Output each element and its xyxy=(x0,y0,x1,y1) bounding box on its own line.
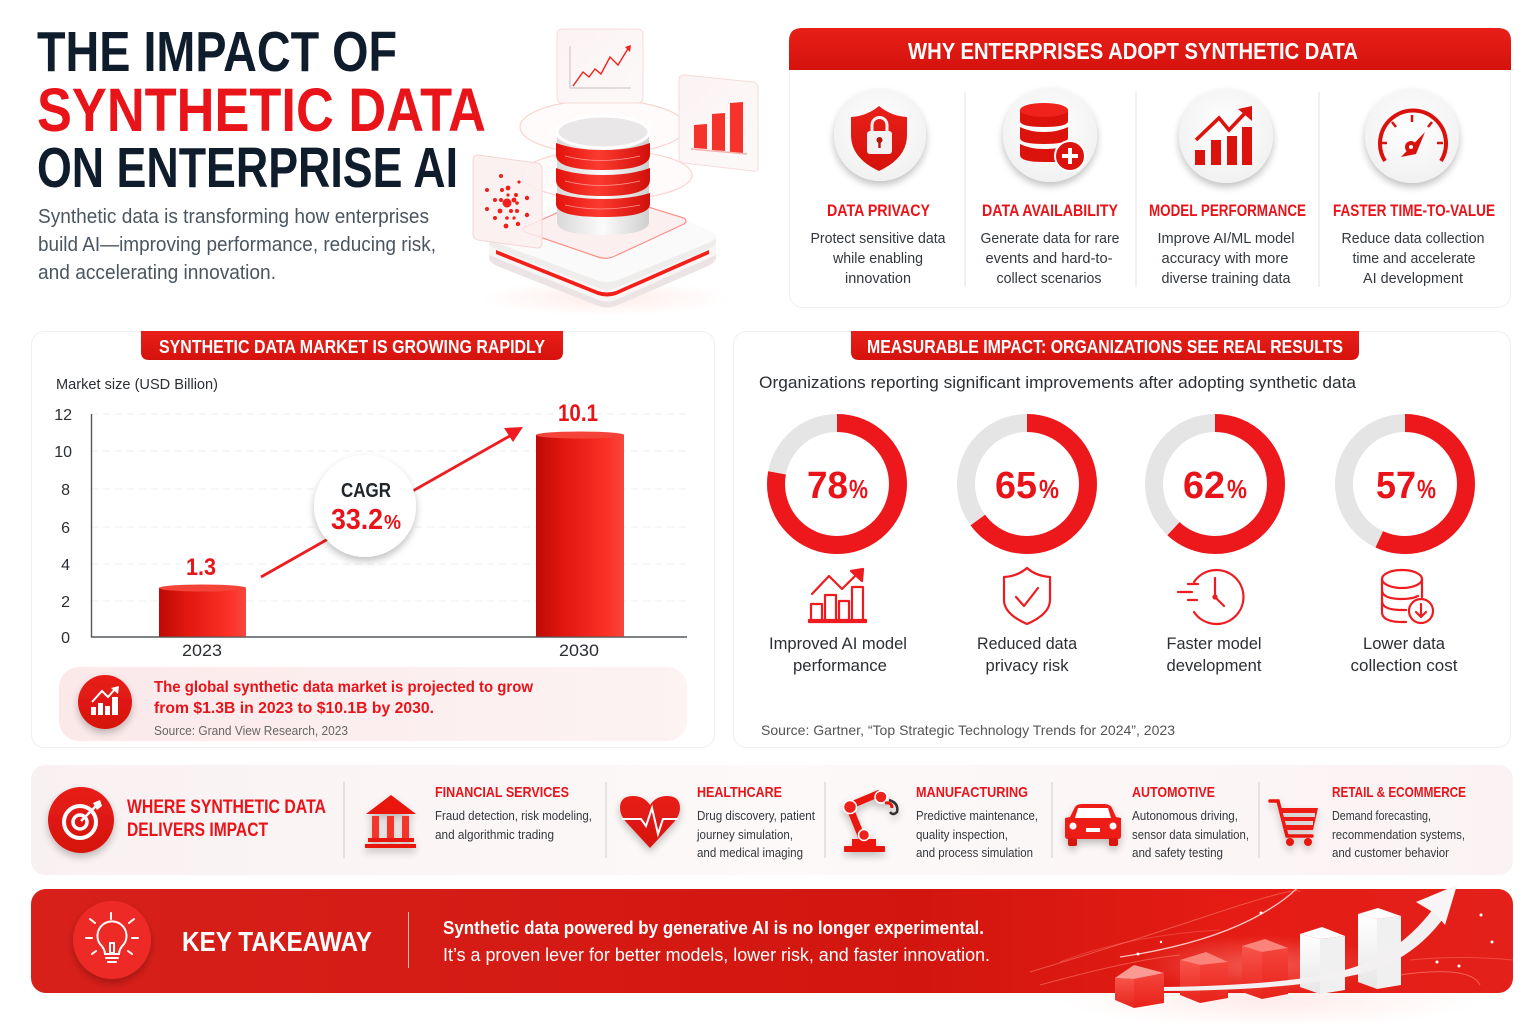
panel: bar chart xyxy=(679,75,758,171)
sector: manufacturing: quality inspection, xyxy=(916,828,1008,842)
callout: market projection: The global synthetic data market is projected to grow xyxy=(154,679,534,696)
card: data privacy xyxy=(810,89,946,287)
donut chart: 78 xyxy=(807,465,848,507)
donut chart xyxy=(776,423,898,545)
sector: manufacturing: and process simulation xyxy=(916,846,1033,860)
sector: retail and ecommerce: and customer behavior xyxy=(1332,846,1449,860)
panel header: WHY ENTERPRISES ADOPT SYNTHETIC DATA xyxy=(908,38,1358,64)
card: data privacy: Protect sensitive data xyxy=(810,231,946,247)
bar 2030: 10.1 xyxy=(558,400,598,427)
cylinder xyxy=(557,132,649,235)
card: model performance xyxy=(1149,89,1306,287)
card: model performance: Improve AI/ML model xyxy=(1158,231,1294,247)
card: faster time-to-value: time and accelerate xyxy=(1352,251,1476,267)
section heading: DELIVERS IMPACT xyxy=(127,819,268,841)
title: THE IMPACT OF xyxy=(37,20,397,84)
sector: automotive: Autonomous driving, xyxy=(1132,809,1238,823)
panel header tab xyxy=(851,331,1359,360)
sector: healthcare: HEALTHCARE xyxy=(697,784,782,801)
illustration: rising cubes and arrow xyxy=(1115,885,1457,1008)
metric: 65%: Reduced data xyxy=(977,635,1078,653)
arrow: growth xyxy=(261,427,523,577)
panel: dot cluster xyxy=(473,155,542,248)
takeaway message: Synthetic data powered by generative AI is no longer experimental. xyxy=(443,918,984,938)
card: data privacy: innovation xyxy=(845,271,911,287)
icon: shopping cart xyxy=(1270,801,1318,846)
metric: 62% xyxy=(1154,423,1276,675)
section heading xyxy=(48,787,326,853)
sector: healthcare: journey simulation, xyxy=(696,828,793,842)
bar chart: 8 xyxy=(61,482,70,499)
light swooshes xyxy=(1030,885,1513,985)
callout: CAGR: CAGR xyxy=(341,480,391,502)
card: model performance: accuracy with more xyxy=(1162,251,1288,267)
illustration: database on platform xyxy=(473,29,758,316)
icon: database down xyxy=(1382,570,1433,623)
card: data privacy: DATA PRIVACY xyxy=(827,201,931,220)
sector: retail and ecommerce: Demand forecasting, xyxy=(1332,809,1431,823)
subtitle: build AI—improving performance, reducing risk, xyxy=(38,234,436,256)
bar chart: 6 xyxy=(61,520,70,537)
panel: measurable impact xyxy=(734,331,1510,748)
metric: 57%: Lower data xyxy=(1363,635,1446,653)
icon: growth chart xyxy=(78,675,132,729)
panel: why enterprises adopt xyxy=(789,28,1511,308)
bar 2023: 2023 xyxy=(182,642,222,660)
arrow: growth xyxy=(1164,885,1457,991)
card: faster time-to-value xyxy=(1333,89,1495,287)
sector: automotive xyxy=(1065,784,1249,860)
card: data availability: DATA AVAILABILITY xyxy=(982,201,1119,220)
icon: heart pulse xyxy=(620,796,680,848)
panel: market growth chart xyxy=(32,331,714,748)
metric: 65% xyxy=(966,423,1088,675)
panel header tab xyxy=(141,331,563,360)
cube 4 xyxy=(1300,927,1345,994)
card: data availability xyxy=(980,88,1120,287)
subtitle xyxy=(38,206,436,284)
donut chart: % xyxy=(849,474,868,504)
icon: speedometer xyxy=(1365,89,1459,183)
panel: key takeaway: KEY TAKEAWAY xyxy=(182,926,372,957)
icon: rising bars xyxy=(1179,89,1273,183)
panel header tab: SYNTHETIC DATA MARKET IS GROWING RAPIDLY xyxy=(159,337,545,357)
sector: financial services: and algorithmic trading xyxy=(435,828,554,842)
icon: shield lock xyxy=(834,89,926,181)
metric: 57% xyxy=(1344,423,1466,675)
bar chart xyxy=(54,400,687,660)
metric: 62%: development xyxy=(1166,657,1262,675)
icon: clock speed xyxy=(1178,570,1243,624)
panel: measurable impact: Source: Gartner, “Top Strategic Technology Trends for 2024”, 2023 xyxy=(761,722,1175,738)
upper slab xyxy=(489,190,716,290)
card: faster time-to-value: FASTER TIME-TO-VALUE xyxy=(1333,201,1495,220)
sector: financial services: Fraud detection, risk modeling, xyxy=(435,809,592,823)
panel: market growth chart: Market size (USD Billion) xyxy=(56,376,218,393)
donut chart: 57 xyxy=(1376,465,1416,507)
sector: retail and ecommerce: recommendation systems, xyxy=(1332,828,1465,842)
orbit rings xyxy=(520,100,686,154)
sector: healthcare: Drug discovery, patient xyxy=(697,809,815,823)
icon: database plus xyxy=(1003,88,1097,182)
title: ON ENTERPRISE AI xyxy=(37,136,458,200)
card: data availability: events and hard-to- xyxy=(986,251,1113,267)
bar 2030: 2030 xyxy=(559,642,599,660)
sector: retail and ecommerce: RETAIL & ECOMMERCE xyxy=(1332,784,1466,801)
metric: 62%: Faster model xyxy=(1166,635,1262,653)
title: SYNTHETIC DATA xyxy=(37,76,486,144)
callout: market projection: from $1.3B in 2023 to $10.1B by 2030. xyxy=(154,700,434,717)
card: faster time-to-value: Reduce data collection xyxy=(1342,231,1484,247)
card: model performance: diverse training data xyxy=(1162,271,1291,287)
lower slab xyxy=(489,240,716,308)
panel: measurable impact: Organizations reporting significant improvements after adopting synthetic data xyxy=(759,373,1357,392)
sector: automotive: and safety testing xyxy=(1132,846,1223,860)
panel header tab: MEASURABLE IMPACT: ORGANIZATIONS SEE REAL RESULTS xyxy=(867,337,1343,357)
bar chart: 0 xyxy=(61,630,70,647)
cube 3 xyxy=(1242,939,1288,999)
card: data availability: collect scenarios xyxy=(996,271,1102,287)
sector: financial services xyxy=(365,784,592,848)
metric: 65%: privacy risk xyxy=(986,657,1069,675)
subtitle: and accelerating innovation. xyxy=(38,262,276,284)
metric: 78%: performance xyxy=(793,657,887,675)
sector: healthcare: and medical imaging xyxy=(697,846,803,860)
sector: automotive: AUTOMOTIVE xyxy=(1132,784,1215,801)
card: data availability: Generate data for rare xyxy=(980,231,1120,247)
sector: healthcare xyxy=(620,784,815,860)
bar chart: 2 xyxy=(61,594,70,611)
bar 2023: 1.3 xyxy=(186,554,216,581)
panel header xyxy=(789,28,1511,70)
subtitle: Synthetic data is transforming how enterprises xyxy=(38,206,429,228)
icon: light bulb xyxy=(73,901,151,979)
sector: financial services: FINANCIAL SERVICES xyxy=(435,784,569,801)
donut chart: % xyxy=(1227,474,1247,504)
takeaway message xyxy=(443,918,990,965)
bottom haze xyxy=(1060,972,1480,1024)
title xyxy=(37,20,486,200)
icon: target xyxy=(48,787,114,853)
donut chart: % xyxy=(1039,474,1059,504)
callout: CAGR xyxy=(314,455,416,557)
donut chart: 65 xyxy=(995,465,1037,507)
icon: chart up xyxy=(809,569,866,622)
takeaway message: It’s a proven lever for better models, lower risk, and faster innovation. xyxy=(443,945,990,965)
card: data privacy: while enabling xyxy=(832,251,923,267)
sparkles xyxy=(1136,912,1494,968)
icon: bank xyxy=(365,795,416,848)
callout: market projection: Source: Grand View Research, 2023 xyxy=(154,724,348,738)
callout: CAGR: 33.2 xyxy=(331,504,383,536)
sector: automotive: sensor data simulation, xyxy=(1132,828,1249,842)
panel: line chart xyxy=(557,29,643,103)
callout: CAGR: % xyxy=(384,512,401,534)
sector: manufacturing: Predictive maintenance, xyxy=(916,809,1038,823)
sector: manufacturing xyxy=(844,784,1038,860)
icon: car xyxy=(1065,804,1121,846)
metric: 57%: collection cost xyxy=(1350,657,1458,675)
cube 5 xyxy=(1358,908,1401,989)
panel: where synthetic data delivers impact xyxy=(31,765,1513,875)
metric: 78% xyxy=(769,423,907,675)
bar chart: 10 xyxy=(54,444,72,461)
icon: robot arm xyxy=(844,791,897,852)
panel: key takeaway xyxy=(31,885,1513,1008)
donut chart xyxy=(1154,423,1276,545)
card: faster time-to-value: AI development xyxy=(1363,271,1463,287)
bar chart: 4 xyxy=(61,557,70,574)
bar 2030 xyxy=(536,400,624,660)
donut chart: % xyxy=(1417,474,1436,504)
card: model performance: MODEL PERFORMANCE xyxy=(1149,201,1306,220)
metric: 78%: Improved AI model xyxy=(769,635,907,653)
icon: shield check xyxy=(1004,568,1050,624)
bar chart: 12 xyxy=(54,407,72,424)
sector: manufacturing: MANUFACTURING xyxy=(916,784,1028,801)
donut chart xyxy=(1344,423,1466,545)
sector: retail and ecommerce xyxy=(1270,784,1466,860)
callout: market projection xyxy=(59,667,687,741)
cube 2 xyxy=(1180,952,1228,1003)
section heading: WHERE SYNTHETIC DATA xyxy=(127,796,326,818)
cube 1 xyxy=(1115,965,1164,1008)
bar 2023 xyxy=(159,554,246,660)
donut chart xyxy=(966,423,1088,545)
donut chart: 62 xyxy=(1183,465,1225,507)
